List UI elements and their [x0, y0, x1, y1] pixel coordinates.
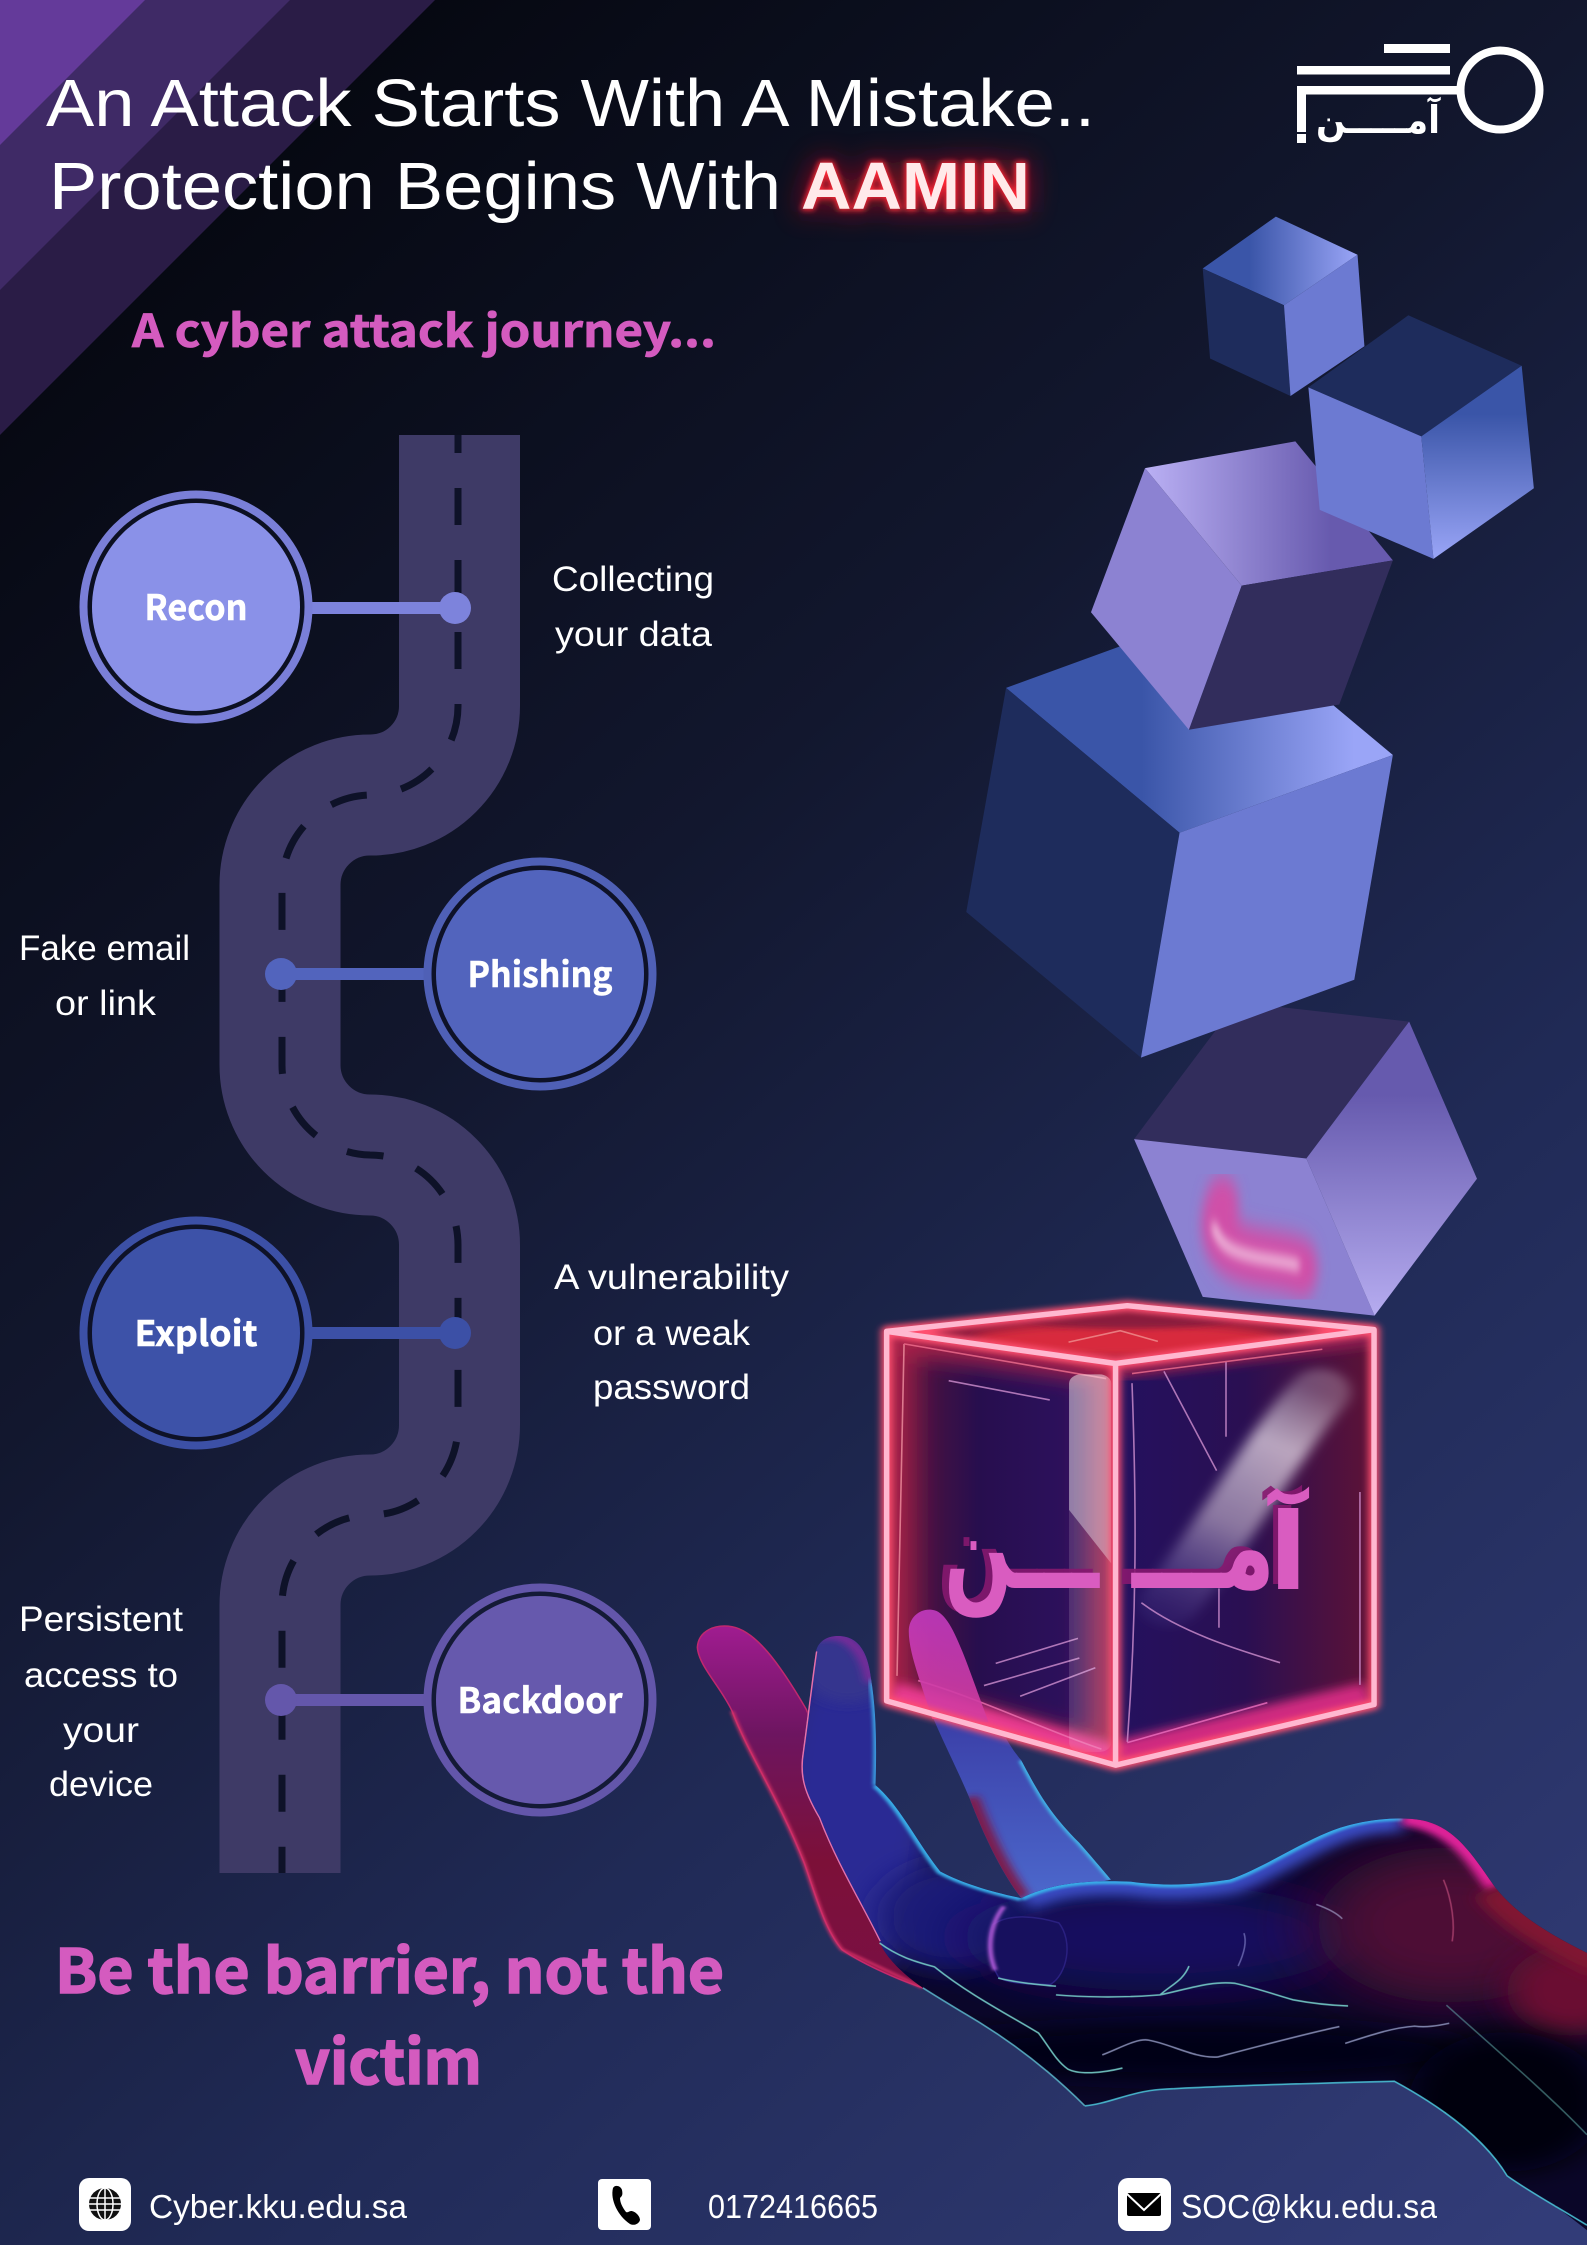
word shadow: ـــن — [937, 1471, 1093, 1614]
road — [280, 435, 460, 1873]
label: Persistent access to your device: access to — [24, 1656, 178, 1695]
hand — [697, 1610, 1587, 2245]
footer: website: Cyber.kku.edu.sa — [149, 2188, 408, 2225]
label: Collecting your data — [552, 560, 714, 654]
title: An Attack Starts With A Mistake.. — [46, 66, 1095, 141]
label: Collecting your data: your data — [555, 615, 713, 654]
main hand — [773, 1621, 1587, 2245]
icon: globe — [79, 2178, 131, 2231]
cube thin scratch lines — [897, 1331, 1360, 1749]
icon: phone — [598, 2179, 651, 2230]
title — [46, 66, 1095, 224]
step: Exploit: Exploit — [134, 1306, 258, 1357]
label: Persistent access to your device: device — [49, 1765, 153, 1804]
word shadow — [937, 1471, 1302, 1614]
footer: website — [79, 2178, 408, 2231]
cube right face — [1116, 1330, 1374, 1765]
logo: آمـــــن — [1316, 96, 1441, 142]
tagline: victim — [295, 2013, 482, 2102]
word fill: مـــ — [1131, 1475, 1275, 1617]
footer: phone — [598, 2179, 878, 2230]
footer: email — [1118, 2178, 1438, 2231]
fingertip through cube — [909, 1610, 989, 1722]
glowing glass cube — [887, 1306, 1374, 1765]
label: Persistent access to your device: your — [63, 1711, 139, 1750]
title: AAMIN — [801, 149, 1030, 224]
cube Arabic word — [937, 1471, 1308, 1618]
word fill: ـــن — [944, 1475, 1100, 1618]
pinky finger — [697, 1626, 923, 1988]
label: Persistent access to your device — [19, 1600, 183, 1804]
step: Backdoor: Backdoor — [458, 1673, 623, 1724]
block: small top — [1203, 217, 1364, 396]
label: Fake email or link — [19, 929, 190, 1023]
word shadow: آ — [1261, 1484, 1302, 1609]
label: Persistent access to your device: Persistent — [19, 1600, 183, 1639]
hand contour lines — [880, 1880, 1587, 2225]
footer: phone: 0172416665 — [708, 2188, 878, 2225]
tagline: Be the barrier, not the — [55, 1922, 724, 2011]
step: Phishing — [265, 862, 652, 1086]
icon: envelope — [1118, 2178, 1171, 2231]
middle finger — [934, 1718, 1111, 1898]
step: Backdoor — [265, 1588, 652, 1812]
footer: email: SOC@kku.edu.sa — [1181, 2188, 1438, 2225]
label: Fake email or link: Fake email — [19, 929, 190, 968]
cube glass highlight strip — [1069, 1374, 1111, 1752]
cube neon edges — [887, 1306, 1374, 1765]
block: lower purple — [1134, 1002, 1477, 1316]
label: A vulnerability or a weak password: password — [593, 1368, 750, 1407]
title: Protection Begins With — [49, 149, 781, 224]
block: right blue — [1308, 315, 1534, 559]
floating blocks — [966, 217, 1534, 1316]
diagonal purple stripes — [0, 0, 435, 435]
word fill: آ — [1267, 1488, 1308, 1613]
tagline — [55, 1922, 724, 2102]
word fill — [944, 1475, 1308, 1618]
step: Recon: Recon — [144, 580, 248, 631]
title: AAMIN — [801, 149, 1030, 224]
step: Phishing: Phishing — [468, 947, 613, 998]
thumb — [989, 1906, 1067, 1985]
cube left face — [887, 1331, 1116, 1765]
word shadow: مـــ — [1122, 1471, 1266, 1613]
label: A vulnerability or a weak password — [554, 1258, 790, 1407]
label: A vulnerability or a weak password: or a weak — [593, 1314, 751, 1353]
heading: journey: A cyber attack journey... — [131, 295, 716, 360]
step: Exploit — [84, 1220, 471, 1446]
cube top face — [932, 1308, 1323, 1360]
block: big blue — [966, 610, 1393, 1058]
step: Recon — [84, 494, 471, 720]
label: Fake email or link: or link — [55, 984, 157, 1023]
label: Collecting your data: Collecting — [552, 560, 714, 599]
logo — [1297, 44, 1540, 143]
label: A vulnerability or a weak password: A vulnerability — [554, 1258, 790, 1297]
title: AAMIN — [801, 149, 1030, 224]
block: upper purple — [1091, 441, 1393, 730]
